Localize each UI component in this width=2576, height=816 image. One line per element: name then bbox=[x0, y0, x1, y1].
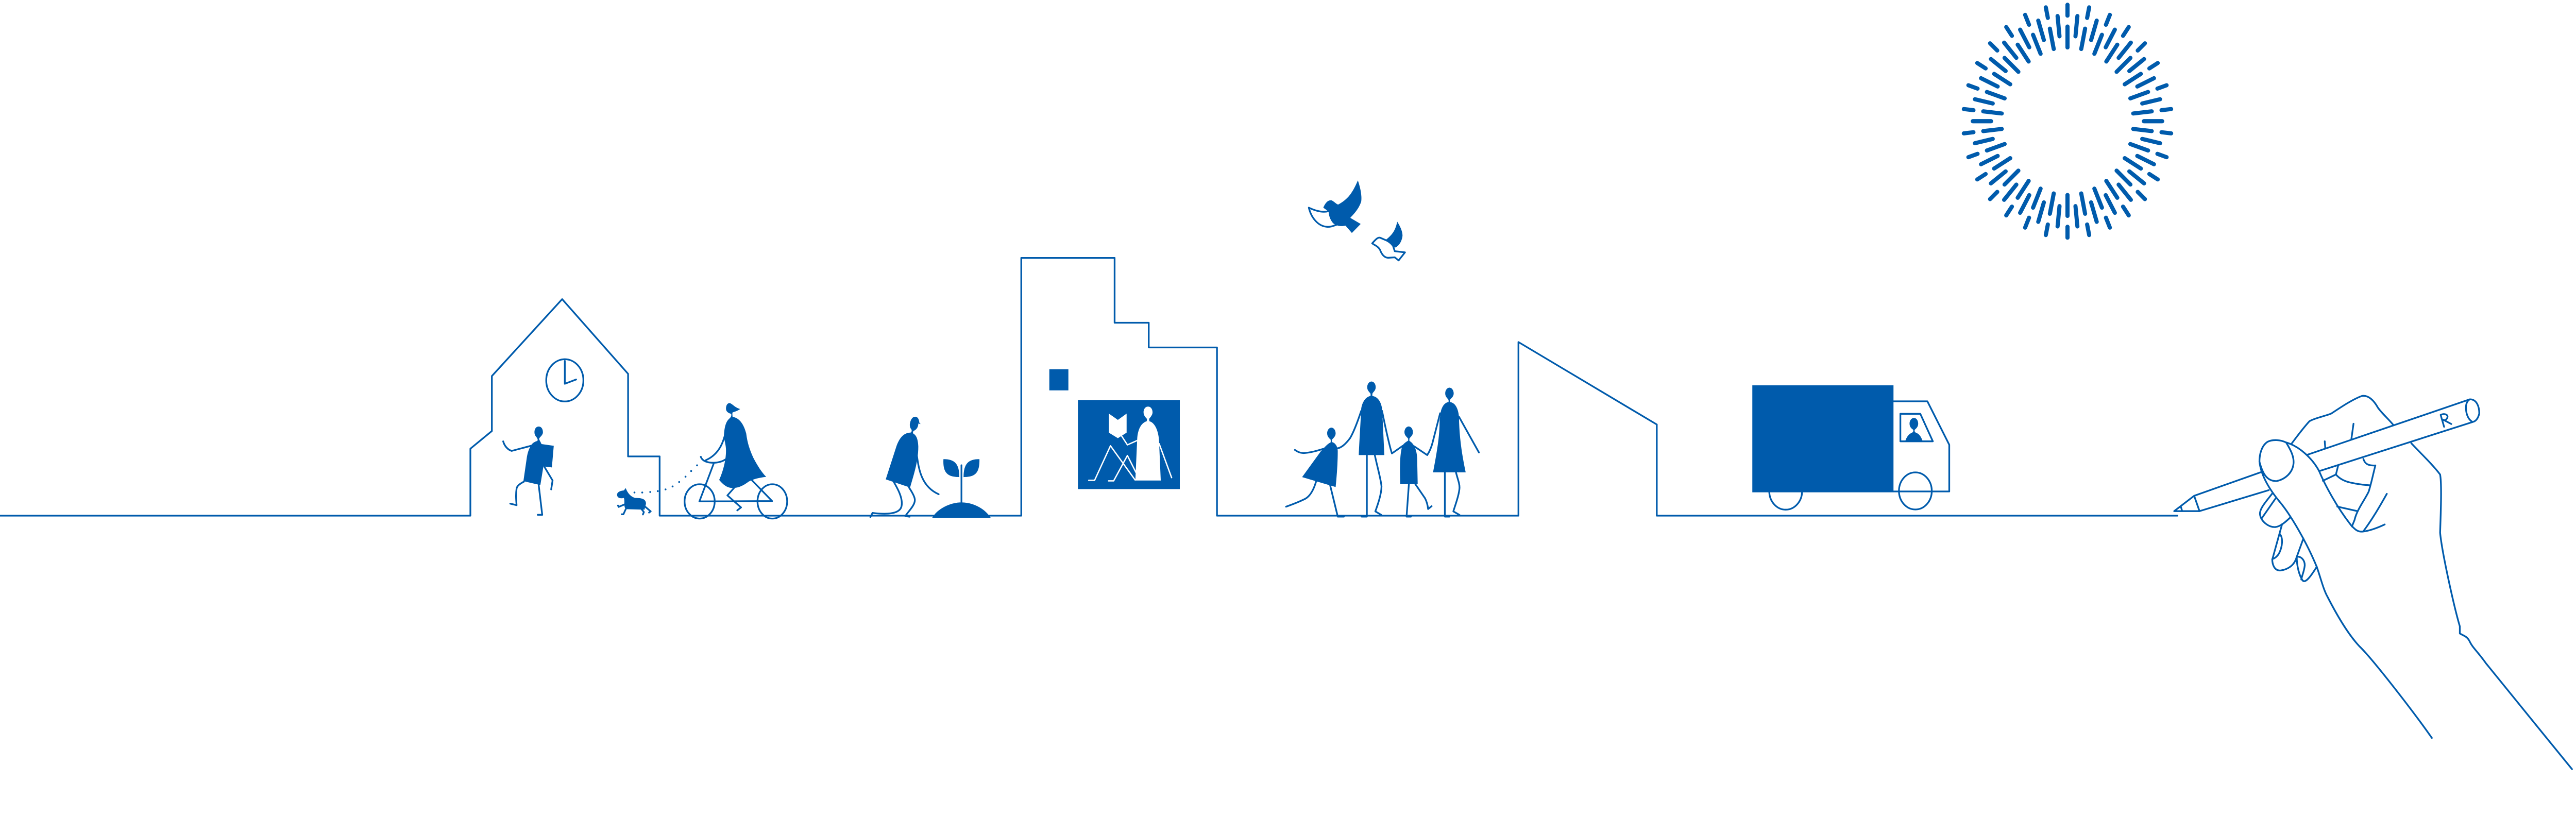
clock tower scene bbox=[503, 359, 787, 519]
hand holding a pencil bbox=[2174, 396, 2572, 769]
icon: sun with radiating rays bbox=[1964, 5, 2171, 237]
small window bbox=[1049, 369, 1069, 390]
hand outline bbox=[2260, 396, 2572, 769]
icon: dog bbox=[617, 488, 651, 515]
delivery truck bbox=[1752, 385, 1949, 509]
cargo box bbox=[1752, 385, 1893, 492]
icon: sprout bbox=[932, 459, 991, 518]
front wheel bbox=[1899, 472, 1932, 509]
icon: clock bbox=[546, 359, 583, 401]
gardener and building scene bbox=[870, 369, 1180, 518]
cab outline bbox=[1893, 401, 1949, 491]
driver bbox=[1905, 418, 1923, 441]
cab window bbox=[1901, 414, 1933, 441]
icon: large bird bbox=[1309, 180, 1362, 233]
rear wheel bbox=[1769, 472, 1802, 509]
pencil bbox=[2174, 399, 2479, 511]
dotted leash bbox=[634, 465, 697, 492]
person walking bbox=[870, 417, 939, 517]
birds and family scene bbox=[1286, 180, 1479, 517]
skyline ground line with building outlines bbox=[0, 258, 2177, 516]
fingers bbox=[2260, 423, 2387, 581]
person with backpack bbox=[503, 427, 554, 515]
family holding hands bbox=[1286, 382, 1479, 517]
icon: small bird bbox=[1372, 222, 1405, 261]
person riding a bicycle bbox=[685, 403, 787, 519]
window with person reading bbox=[1078, 400, 1180, 489]
